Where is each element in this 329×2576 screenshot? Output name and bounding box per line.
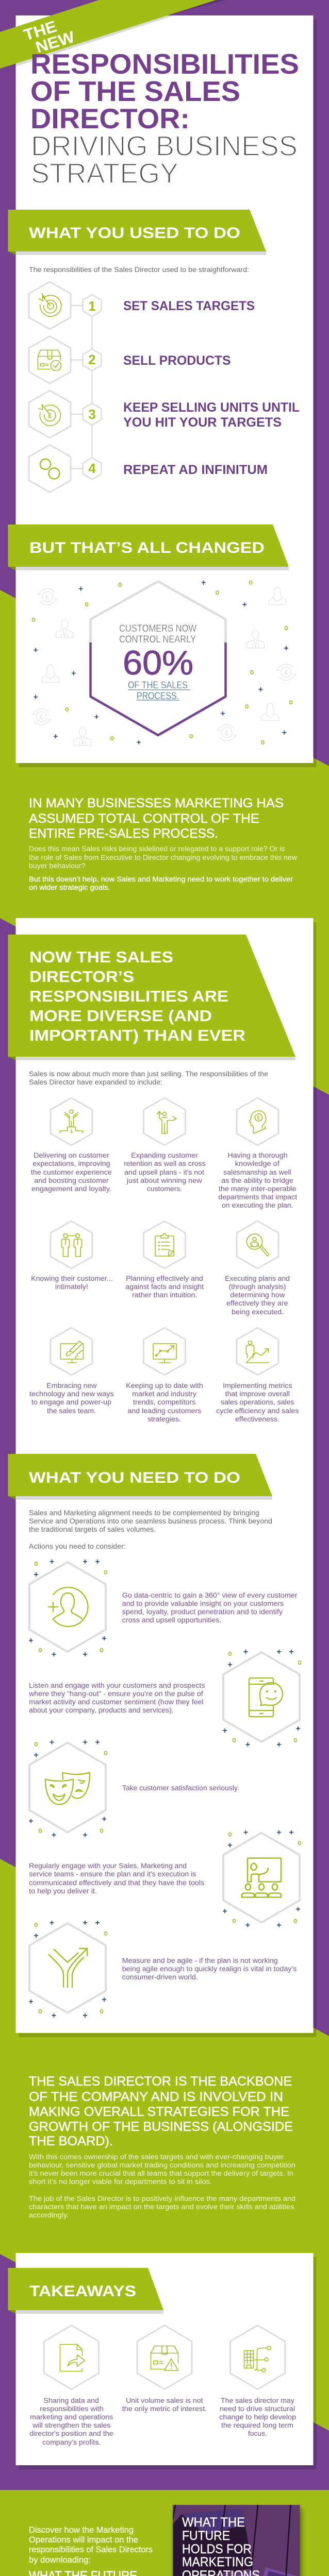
item: executing plans: (through analysis): [229, 1283, 286, 1291]
takeaway: sharing data: [29, 2326, 113, 2446]
item: having a thorough knowledge: salesmanship as well: [223, 1168, 291, 1176]
intro text: Sales Director have expanded to include:: [29, 1078, 162, 1086]
text block: With this comes ownership of the sales targets and with ever-changing buyer: [29, 2153, 284, 2161]
panel: intro and what you used to do: [0, 0, 317, 767]
takeaway: unit volume: Unit volume sales is not: [126, 2397, 203, 2404]
title: RESPONSIBILITIES: [30, 48, 299, 80]
item: embracing new technology: the sales team.: [47, 1407, 96, 1415]
heading: THE SALES DIRECTOR IS THE BACKBONE: [29, 2074, 292, 2089]
item: embracing new technology: [29, 1328, 114, 1415]
icon: presentation: [242, 1858, 281, 1897]
item: having a thorough knowledge: as the ability to bridge: [221, 1177, 293, 1184]
item: having a thorough knowledge: Having a thorough: [228, 1151, 288, 1159]
action: take customer satisfaction seriously: [29, 1740, 239, 1837]
item: keeping up to date: Keeping up to date with: [126, 1382, 203, 1389]
action: listen and engage: about your company, products and services).: [29, 1706, 174, 1714]
action: take customer satisfaction seriously: Take customer satisfaction seriously.: [122, 1784, 239, 1792]
banner: now the sales director's responsibilities: RESPONSIBILITIES ARE: [29, 987, 228, 1005]
item: keeping up to date: market and industry: [132, 1390, 196, 1398]
action: regularly engage: Regularly engage with your Sales, Marketing and: [29, 1862, 187, 1870]
item: planning effectively: against facts and insight: [125, 1283, 204, 1291]
action: measure and be agile: Measure and be agile - if the plan is not working: [122, 1957, 278, 1964]
item: having a thorough knowledge: the many inter-operable: [219, 1185, 296, 1193]
banner: what you need to do: WHAT YOU NEED TO DO: [29, 1469, 240, 1486]
title: OF THE SALES: [30, 75, 240, 107]
intro text: Sales is now about much more than just selling. The responsibilities of the: [29, 1070, 268, 1078]
text block: Does this mean Sales risks being sidelined or relegated to a support role? Or is: [29, 845, 285, 853]
text block: Actions you need to consider:: [29, 1543, 126, 1550]
item: planning effectively: [125, 1221, 204, 1299]
icon: phone with smile: [249, 1678, 283, 1717]
action: regularly engage: communicated effectively and that they have the tools: [29, 1879, 204, 1887]
takeaway: sharing data: company's profits.: [42, 2438, 101, 2446]
banner: takeaways: [8, 2268, 163, 2314]
icon: podium: [60, 1110, 83, 1133]
icon: person with growth chart: [246, 1341, 269, 1363]
item: having a thorough knowledge: [218, 1098, 297, 1209]
report cover: FUTURE: [182, 2529, 230, 2543]
banner: now the sales director's responsibilities: DIRECTOR’S: [29, 968, 134, 986]
heading: MAKING OVERALL STRATEGIES FOR THE: [29, 2105, 289, 2119]
action: listen and engage: [28, 1650, 301, 1747]
item: expanding customer retention: retention as well as cross: [124, 1160, 206, 1167]
section: the sales director is the backbone: [29, 2074, 295, 2219]
action: go data-centric: Go data-centric to gain a 360° view of every customer: [122, 1591, 298, 1599]
step 4: repeat ad infinitum: [29, 445, 268, 493]
item: embracing new technology: Embracing new: [46, 1382, 97, 1389]
heading: [29, 2074, 293, 2148]
item: knowing their customer: intimately!: [55, 1283, 88, 1291]
step 3: keep selling units: YOU HIT YOUR TARGETS: [123, 415, 282, 430]
stat hexagon: 60% of the sales process: 60%: [123, 643, 193, 682]
step 1: set sales targets: 1: [88, 298, 96, 314]
banner: but that's all changed: [8, 524, 289, 570]
action: go data-centric: spend, loyalty, product penetration and to identify: [122, 1608, 283, 1616]
banner: now the sales director's responsibilities: [8, 935, 295, 1060]
takeaway: structural change: need to drive structural: [220, 2405, 295, 2413]
action: regularly engage: [29, 1830, 301, 1927]
text block: buyer behaviour?: [29, 862, 86, 870]
takeaway: structural change: change to help develop: [219, 2413, 296, 2421]
item: delivering on customer expectations: expectations, improving: [32, 1160, 110, 1167]
item: having a thorough knowledge: knowledge of: [235, 1160, 279, 1167]
item: executing plans: [225, 1221, 290, 1316]
report cover: [173, 2505, 301, 2576]
banner: what you need to do: [8, 1454, 272, 1500]
item: embracing new technology: to engage and power-up: [31, 1398, 111, 1406]
takeaway: sharing data: will strengthen the sales: [32, 2421, 111, 2429]
text block: by downloading:: [29, 2555, 91, 2565]
report cover: WHAT THE: [182, 2515, 245, 2530]
icon: infinity: [40, 459, 60, 479]
text block: Service and Operations into one seamless business process. Think beyond: [29, 1517, 272, 1525]
text block: on wider strategic goals.: [29, 884, 110, 891]
item: knowing their customer: [31, 1221, 113, 1291]
ribbon shadow: [15, 0, 225, 66]
title: [30, 48, 299, 189]
step 1: set sales targets: SET SALES TARGETS: [123, 299, 255, 313]
text block: it’s never been more crucial that all teams that support the delivery of targets. In: [29, 2170, 293, 2177]
text block: characters that have an impact on the targets and evolve their skills and abilities: [29, 2203, 294, 2211]
step 2: sell products: [29, 336, 231, 383]
step 3: keep selling units: £: [48, 412, 52, 419]
action: regularly engage: to help you deliver it.: [29, 1887, 97, 1895]
banner: but that's all changed: BUT THAT’S ALL CHANGED: [29, 539, 265, 556]
icon: clipboard: [155, 1233, 174, 1256]
icon: diverging arrow paths: [48, 1948, 87, 1988]
section: marketing control of pre-sales: [29, 796, 297, 891]
item: having a thorough knowledge: £: [257, 1115, 260, 1121]
item: delivering on customer expectations: [31, 1098, 112, 1193]
text block: accordingly.: [29, 2211, 69, 2219]
decorative scatter of customers and currency: £: [45, 593, 50, 601]
icon: building with branches: [244, 2346, 271, 2372]
item: keeping up to date: strategies.: [147, 1415, 181, 1423]
step 2: sell products: 2: [88, 352, 96, 367]
action: measure and be agile: consumer-driven world.: [122, 1973, 198, 1981]
item: delivering on customer expectations: 1: [70, 1129, 73, 1134]
action: listen and engage: market activity and customer sentiment (how they feel: [29, 1698, 204, 1706]
takeaway: structural change: [219, 2326, 296, 2437]
step connectors: [71, 306, 92, 469]
banner: takeaways: TAKEAWAYS: [29, 2283, 136, 2300]
heading: ASSUMED TOTAL CONTROL OF THE: [29, 811, 259, 826]
item: planning effectively: Planning effectively and: [126, 1275, 203, 1282]
item: keeping up to date: [126, 1328, 203, 1423]
item: keeping up to date: and leading customers: [127, 1407, 201, 1415]
stat hexagon: 60% of the sales process: CONTROL NEARLY: [119, 634, 196, 645]
step 4: repeat ad infinitum: REPEAT AD INFINITUM: [123, 463, 268, 477]
action: go data-centric: and to provide valuable insight on your customers: [122, 1600, 284, 1607]
item: having a thorough knowledge: on executing the plan.: [222, 1201, 293, 1209]
item: implementing metrics: Implementing metrics: [223, 1382, 292, 1389]
icon: customer profile with plus: [48, 1587, 88, 1626]
takeaway: unit volume: the only metric of interest.: [122, 2405, 207, 2413]
takeaway: sharing data: responsibilities with: [40, 2405, 104, 2413]
heading: OF THE COMPANY AND IS INVOLVED IN: [29, 2090, 283, 2104]
action: measure and be agile: being agile enough to quickly realign is vital in today's: [122, 1965, 297, 1973]
action: go data-centric: cross and upsell opportunities.: [122, 1616, 221, 1624]
icon: person with arrows: [157, 1111, 176, 1133]
stat hexagon: 60% of the sales process: PROCESS.: [137, 690, 179, 702]
action: measure and be agile: [29, 1921, 297, 2018]
text block: the traditional targets of sales volumes.: [29, 1526, 156, 1533]
heading: [29, 796, 284, 841]
ribbon: the new: NEW: [34, 27, 77, 57]
item: expanding customer retention: [124, 1098, 206, 1193]
item: having a thorough knowledge: departments that impact: [218, 1193, 297, 1201]
step 3: keep selling units: 3: [88, 406, 96, 422]
title: STRATEGY: [31, 157, 178, 189]
item: delivering on customer expectations: engagement and loyalty.: [31, 1185, 111, 1193]
icon: target: [39, 293, 61, 316]
takeaway: structural change: focus.: [248, 2430, 267, 2437]
takeaway: unit volume: [122, 2326, 207, 2413]
icon: monitor with brush: [61, 1341, 84, 1363]
item: expanding customer retention: customers.: [147, 1185, 182, 1193]
icon: theatre masks: [45, 1772, 90, 1804]
item: implementing metrics: sales operations, sales: [221, 1398, 294, 1406]
banner: now the sales director's responsibilities: MORE DIVERSE (AND: [29, 1007, 212, 1025]
text block: Discover how the Marketing: [29, 2525, 134, 2535]
stat hexagon: 60% of the sales process: [91, 581, 226, 735]
heading: GROWTH OF THE BUSINESS (ALONGSIDE: [29, 2120, 293, 2134]
banner: what you used to do: [8, 210, 266, 255]
step 3: keep selling units: KEEP SELLING UNITS UNTIL: [123, 400, 300, 415]
panel: responsibilities and actions: [8, 918, 317, 2037]
text block: Operations will impact on the: [29, 2535, 138, 2545]
step 1: set sales targets: [29, 282, 255, 329]
icon: monitor with chart: [153, 1344, 176, 1363]
icon: file share: [60, 2344, 85, 2371]
banner: now the sales director's responsibilities: NOW THE SALES: [29, 948, 173, 966]
panel: takeaways: [8, 2253, 317, 2469]
banner: now the sales director's responsibilities: IMPORTANT) THAN EVER: [29, 1026, 245, 1044]
intro text: The responsibilities of the Sales Director used to be straightforward:: [29, 266, 249, 274]
ribbon: the new: [0, 0, 216, 69]
stat hexagon: 60% of the sales process: OF THE SALES: [128, 680, 188, 691]
takeaway: sharing data: director's position and the: [29, 2430, 113, 2437]
item: embracing new technology: technology and new ways: [29, 1390, 114, 1398]
text block: [29, 2525, 153, 2565]
text block: the role of Sales from Executive to Director changing evolving to embrace this new: [29, 854, 297, 861]
step 2: sell products: SELL PRODUCTS: [123, 353, 231, 368]
item: implementing metrics: that improve overall: [225, 1390, 290, 1398]
text block: [29, 1509, 272, 1550]
icon: box with warning: [151, 2346, 178, 2370]
report cover: HOLDS FOR: [182, 2542, 252, 2556]
item: expanding customer retention: Expanding customer: [131, 1151, 198, 1159]
heading: ENTIRE PRE-SALES PROCESS.: [29, 826, 218, 841]
heading: THE BOARD).: [29, 2134, 113, 2148]
heading: IN MANY BUSINESSES MARKETING HAS: [29, 796, 284, 810]
decorative scatter of customers and currency: £: [284, 669, 288, 676]
icon: two people: [62, 1234, 81, 1257]
decorative scatter of customers and currency: [31, 581, 296, 745]
takeaway: sharing data: marketing and operations: [30, 2413, 113, 2421]
title: DRIVING BUSINESS: [31, 130, 298, 162]
action: listen and engage: Listen and engage with your customers and prospects: [29, 1682, 205, 1689]
decorative scatter of customers and currency: £: [225, 729, 229, 737]
ribbon: the new: THE: [22, 17, 59, 44]
action: regularly engage: service teams - ensure the plan and it's execution is: [29, 1870, 196, 1878]
text block: Sales and Marketing alignment needs to be complemented by bringing: [29, 1509, 259, 1517]
decorative scatter of customers and currency: £: [40, 713, 44, 721]
item: implementing metrics: effectiveness.: [235, 1415, 279, 1423]
item: keeping up to date: trends, competitors: [133, 1398, 195, 1406]
item: expanding customer retention: and upsell plans - it's not: [124, 1168, 204, 1176]
item: expanding customer retention: just about winning new: [126, 1177, 202, 1184]
text block: short it’s no longer viable for departments to sit in silos.: [29, 2178, 212, 2185]
text block: responsibilities of Sales Directors: [29, 2545, 153, 2554]
takeaway: structural change: The sales director may: [221, 2397, 294, 2404]
item: implementing metrics: [216, 1328, 299, 1423]
item: executing plans: effectively they are: [226, 1299, 288, 1307]
icon: magnifier on person: [246, 1234, 269, 1256]
item: executing plans: determining how: [230, 1291, 285, 1299]
item: executing plans: being executed.: [232, 1308, 284, 1316]
text block: [29, 845, 297, 891]
text block: behaviour, sensitive global market trading conditions and increasing competition: [29, 2161, 295, 2169]
item: delivering on customer expectations: and boosting customer: [34, 1177, 109, 1184]
step 4: repeat ad infinitum: 4: [88, 461, 96, 476]
text block: [29, 2153, 295, 2219]
icon: head with pound: [250, 1111, 266, 1133]
takeaway: structural change: the required long term: [221, 2421, 293, 2429]
report cover: MARKETING: [182, 2555, 253, 2569]
item: implementing metrics: cycle efficiency and sales: [216, 1407, 299, 1415]
stat hexagon: 60% of the sales process: CUSTOMERS NOW: [119, 623, 197, 634]
icon: box with check: [38, 350, 61, 371]
banner: what you used to do: WHAT YOU USED TO DO: [29, 225, 240, 242]
item: delivering on customer expectations: Delivering on customer: [34, 1151, 109, 1159]
intro text: [29, 1070, 268, 1086]
item: planning effectively: rather than intuition.: [132, 1291, 197, 1299]
item: delivering on customer expectations: the customer experience: [31, 1168, 112, 1176]
section: download call to action: [29, 2505, 301, 2576]
step 3: keep selling units: [29, 391, 300, 438]
item: executing plans: Executing plans and: [225, 1275, 290, 1282]
takeaway: sharing data: Sharing data and: [44, 2397, 99, 2404]
action: go data-centric: [29, 1560, 298, 1656]
text block: The job of the Sales Director is to positively influence the many departments and: [29, 2195, 295, 2202]
icon: pound target: [39, 404, 60, 426]
title: DIRECTOR:: [30, 103, 190, 134]
action: listen and engage: where they “hang-out” - ensure you're on the pulse of: [28, 1690, 203, 1698]
text block: But this doesn’t help, now Sales and Marketing need to work together to deliver: [29, 875, 293, 883]
item: knowing their customer: Knowing their customer...: [31, 1275, 113, 1282]
